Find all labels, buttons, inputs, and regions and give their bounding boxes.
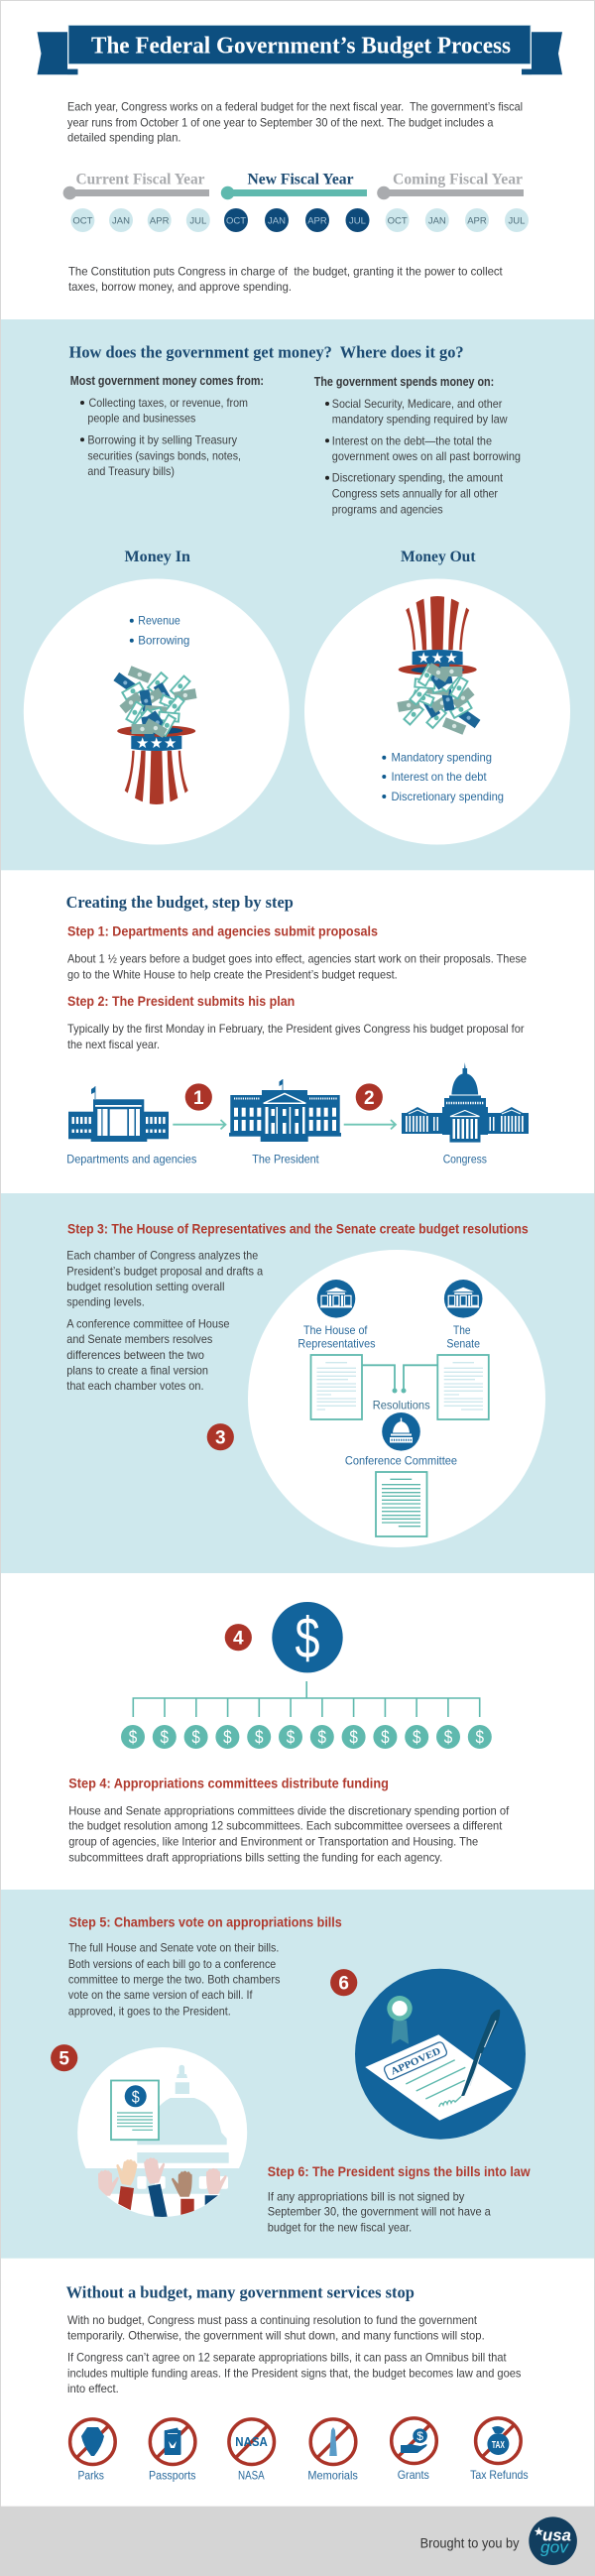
icons: subcommittee dollars: $	[129, 1728, 137, 1748]
building labels	[66, 1152, 487, 1165]
step 3 text: and Senate members resolves	[66, 1332, 212, 1346]
money sources list	[70, 374, 264, 478]
icon: tax refunds: TAX	[492, 2440, 505, 2451]
icons: subcommittee dollars: $	[381, 1728, 390, 1748]
icon: nasa	[229, 2419, 274, 2482]
panel: step 3	[1, 1193, 594, 1573]
intro paragraph: year runs from October 1 of one year to September 30 of the next. The budget includes a	[67, 115, 494, 129]
current fiscal year: JAN	[112, 216, 130, 227]
icon: parks: Parks	[77, 2468, 104, 2482]
building labels: Departments and agencies	[66, 1152, 196, 1165]
current fiscal year: OCT	[72, 216, 93, 227]
bill document: $	[132, 2087, 140, 2107]
spending list: mandatory spending required by law	[332, 413, 508, 427]
step 1: About 1 ½ years before a budget goes into effect, agencies start work on their proposals. These	[67, 952, 527, 966]
step 4 text: the budget resolution among 12 subcommittees. Each subcommittee oversees a different	[68, 1819, 503, 1833]
step 4 text: House and Senate appropriations committees divide the discretionary spending portion of	[68, 1803, 510, 1817]
number 3: 3	[215, 1428, 226, 1448]
intro paragraph	[67, 100, 523, 145]
icons: subcommittee dollars: $	[444, 1728, 452, 1748]
fiscal year timeline	[63, 171, 529, 232]
step 2: Step 2: The President submits his plan	[67, 994, 295, 1009]
step 5 text: vote on the same version of each bill. If	[68, 1988, 253, 2002]
step 5 text	[68, 1914, 342, 2018]
number 4	[225, 1624, 252, 1651]
constitution paragraph	[68, 264, 503, 294]
number 1: 1	[193, 1088, 204, 1109]
illustration: signing the bill	[355, 1969, 526, 2140]
step 6 text: If any appropriations bill is not signed by	[268, 2189, 464, 2203]
current fiscal year: Current Fiscal Year	[75, 171, 205, 187]
icon: parks	[70, 2419, 115, 2482]
number 4: 4	[233, 1629, 244, 1649]
subcommittee tree	[133, 1681, 480, 1717]
constitution paragraph: The Constitution puts Congress in charge of the budget, granting it the power to collect	[68, 264, 503, 278]
chamber labels: Senate	[446, 1336, 480, 1350]
chamber labels: The House of	[303, 1323, 368, 1337]
step 3 text: differences between the two	[66, 1348, 204, 1362]
constitution paragraph: taxes, borrow money, and approve spending.	[68, 280, 292, 294]
money sources list: people and businesses	[87, 412, 195, 426]
spending list: programs and agencies	[332, 502, 443, 516]
step 3 text: plans to create a final version	[66, 1364, 208, 1378]
step 5 text: committee to merge the two. Both chambers	[68, 1973, 280, 1987]
icons: subcommittee dollars: $	[413, 1728, 420, 1748]
step 4 text: subcommittees draft appropriations bills setting the funding for each agency.	[68, 1850, 442, 1864]
title banner	[38, 25, 562, 74]
footer	[0, 2507, 595, 2576]
spending list: government owes on all past borrowing	[332, 449, 521, 463]
icon: passports	[149, 2419, 196, 2482]
building labels: The President	[252, 1152, 319, 1165]
icon: capitol	[402, 1062, 529, 1143]
step 6 text	[268, 2164, 531, 2234]
icon: passports: Passports	[149, 2468, 196, 2482]
arrow	[173, 1120, 226, 1129]
icon: grants	[392, 2418, 436, 2482]
heading: Step 3: The House of Representatives and the Senate create budget resolutions	[67, 1221, 529, 1236]
chamber labels	[298, 1323, 480, 1350]
number 5: 5	[59, 2049, 69, 2069]
resolutions label: Resolutions	[373, 1398, 430, 1411]
step 4 text	[68, 1777, 510, 1864]
panel: step 4	[68, 1602, 510, 1864]
explanation text: includes multiple funding areas. If the President signs that, the budget becomes law and goes	[67, 2366, 521, 2380]
money sources list: Collecting taxes, or revenue, from	[89, 396, 248, 410]
money out circle: Interest on the debt	[391, 770, 487, 784]
logo: usa gov: gov	[540, 2537, 570, 2557]
explanation text: If Congress can’t agree on 12 separate appropriations bills, it can pass an Omnibus bill that	[67, 2350, 507, 2364]
heading: How does the government get money? Where does it go?	[69, 343, 464, 362]
step 3 text: that each chamber votes on.	[66, 1379, 204, 1393]
step 6 text: Step 6: The President signs the bills into law	[268, 2164, 531, 2179]
heading: Without a budget, many government services stop	[66, 2282, 415, 2301]
step 2	[67, 994, 524, 1051]
new fiscal year: JAN	[268, 216, 286, 227]
heading: Creating the budget, step by step	[66, 893, 294, 912]
number 3	[207, 1423, 234, 1450]
spending list: Social Security, Medicare, and other	[332, 397, 502, 411]
coming fiscal year	[377, 171, 529, 232]
spending list: Discretionary spending, the amount	[332, 471, 504, 485]
icons: subcommittee dollars: $	[318, 1728, 326, 1748]
panel: steps 1 and 2	[66, 893, 529, 1165]
number 6	[330, 1969, 357, 1996]
step 6 text: September 30, the government will not have a	[268, 2205, 491, 2219]
money sources list: securities (savings bonds, notes,	[87, 448, 241, 462]
new fiscal year: OCT	[226, 216, 246, 227]
icon: nasa: NASA	[238, 2468, 265, 2482]
icon: white house	[229, 1079, 341, 1142]
money in circle: Borrowing	[138, 633, 189, 647]
spending list: Congress sets annually for all other	[332, 486, 498, 500]
number 2: 2	[364, 1088, 375, 1109]
step 3 text: A conference committee of House	[66, 1316, 230, 1330]
raised hands	[98, 2155, 227, 2217]
icons: subcommittee dollars: $	[287, 1728, 295, 1748]
panel: steps 5 and 6	[1, 1890, 594, 2259]
icons: subcommittee dollars: $	[476, 1728, 484, 1748]
logo: usa gov: usa	[542, 2526, 571, 2545]
step 5 text: The full House and Senate vote on their bills.	[68, 1941, 279, 1955]
icon: hat with money falling out	[397, 592, 480, 735]
credit text: Brought to you by	[420, 2535, 520, 2550]
number 2	[356, 1083, 383, 1111]
senate document	[437, 1355, 489, 1419]
illustration: vote on bills	[77, 2047, 248, 2217]
money out circle	[304, 549, 570, 845]
icons: subcommittee dollars: $	[161, 1728, 169, 1748]
step 2: Typically by the first Monday in February, the President gives Congress his budget proposal for	[67, 1022, 524, 1036]
step 1: Step 1: Departments and agencies submit proposals	[67, 923, 378, 938]
step 1	[67, 923, 527, 981]
new fiscal year	[221, 171, 369, 232]
step 3 text: President’s budget proposal and drafts a	[66, 1264, 263, 1278]
step 1: go to the White House to help create the President’s budget request.	[67, 967, 398, 981]
icons: subcommittee dollars: $	[349, 1728, 358, 1748]
step 4 text: group of agencies, like Interior and Environment or Transportation and Housing. The	[68, 1835, 478, 1849]
explanation text	[67, 2313, 521, 2395]
icon: senate	[444, 1280, 483, 1318]
step 5 text: Both versions of each bill go to a conference	[68, 1957, 276, 1971]
number 5	[51, 2044, 77, 2071]
icon: grants: $	[416, 2429, 423, 2443]
icons: subcommittee dollars	[121, 1725, 492, 1749]
spending list	[314, 375, 521, 516]
money sources list: Borrowing it by selling Treasury	[87, 432, 237, 446]
panel: money in and out	[1, 319, 594, 870]
arrow	[344, 1120, 396, 1129]
money sources list: Most government money comes from:	[70, 374, 264, 388]
chamber labels: The	[453, 1323, 471, 1337]
icon: departments building	[68, 1086, 169, 1142]
icon: large dollar	[272, 1602, 343, 1672]
coming fiscal year: APR	[467, 216, 487, 227]
money in circle: Money In	[125, 549, 190, 565]
final document	[376, 1472, 426, 1536]
coming fiscal year: Coming Fiscal Year	[393, 171, 523, 187]
house document	[311, 1355, 362, 1419]
icon: memorials: Memorials	[307, 2468, 358, 2482]
icon: conference committee	[382, 1412, 420, 1451]
title banner: The Federal Government’s Budget Process	[91, 33, 511, 59]
money out circle: Money Out	[401, 549, 476, 565]
new fiscal year: New Fiscal Year	[248, 171, 354, 187]
step 5 text: Step 5: Chambers vote on appropriations bills	[69, 1914, 342, 1929]
money out circle: Discretionary spending	[391, 790, 504, 803]
building labels: Congress	[443, 1152, 487, 1165]
money in circle	[24, 549, 290, 845]
capitol silhouette	[77, 2065, 248, 2194]
current fiscal year: APR	[150, 216, 170, 227]
icons: subcommittee dollars: $	[191, 1728, 200, 1748]
current fiscal year	[63, 171, 210, 232]
step 3 text	[66, 1248, 263, 1393]
icon: memorials	[307, 2419, 358, 2482]
icons: subcommittee dollars: $	[255, 1728, 263, 1748]
number 6: 6	[338, 1974, 349, 1994]
explanation text: into effect.	[67, 2382, 119, 2395]
step 6 text: budget for the new fiscal year.	[268, 2220, 412, 2234]
step 2: the next fiscal year.	[67, 1038, 160, 1051]
icon: large dollar: $	[296, 1606, 319, 1670]
new fiscal year: JUL	[349, 216, 366, 227]
step 5 text: approved, it goes to the President.	[68, 2004, 231, 2018]
current fiscal year: JUL	[189, 216, 206, 227]
illustration: signing the bill: APPOVED	[389, 2046, 442, 2078]
step 3 text: Each chamber of Congress analyzes the	[66, 1248, 258, 1262]
connectors	[363, 1365, 437, 1393]
explanation text: With no budget, Congress must pass a continuing resolution to fund the government	[67, 2313, 478, 2327]
icon: tax refunds: Tax Refunds	[470, 2468, 529, 2482]
icon: grants: Grants	[398, 2468, 429, 2482]
resolution diagram	[248, 1250, 545, 1547]
icon: nasa: NASA	[235, 2434, 268, 2449]
spending list: The government spends money on:	[314, 375, 494, 389]
money out circle: Mandatory spending	[391, 751, 492, 765]
spending list: Interest on the debt—the total the	[332, 433, 492, 447]
icon: tax refunds	[470, 2418, 529, 2482]
chamber labels: Representatives	[298, 1336, 375, 1350]
icon: house	[317, 1280, 355, 1318]
new fiscal year: APR	[307, 216, 327, 227]
coming fiscal year: OCT	[388, 216, 408, 227]
icon: hat with money falling in	[113, 666, 197, 808]
number 1	[185, 1083, 212, 1111]
panel: without a budget	[66, 2282, 529, 2482]
intro paragraph: Each year, Congress works on a federal budget for the next fiscal year. The government’s fiscal	[67, 100, 523, 114]
coming fiscal year: JAN	[428, 216, 446, 227]
money sources list: and Treasury bills)	[87, 464, 175, 478]
conference committee label: Conference Committee	[345, 1454, 457, 1468]
money in circle: Revenue	[138, 613, 180, 627]
explanation text: temporarily. Otherwise, the government will shut down, and many functions will stop.	[67, 2329, 485, 2343]
step 3 text: spending levels.	[66, 1295, 145, 1309]
intro paragraph: detailed spending plan.	[67, 131, 180, 145]
coming fiscal year: JUL	[509, 216, 525, 227]
icons: subcommittee dollars: $	[223, 1728, 232, 1748]
step 4 text: Step 4: Appropriations committees distribute funding	[68, 1777, 389, 1791]
logo: usa gov	[529, 2516, 577, 2565]
capitol windows	[137, 2176, 228, 2189]
step 3 text: budget resolution setting overall	[66, 1280, 224, 1293]
bill document	[111, 2081, 159, 2140]
